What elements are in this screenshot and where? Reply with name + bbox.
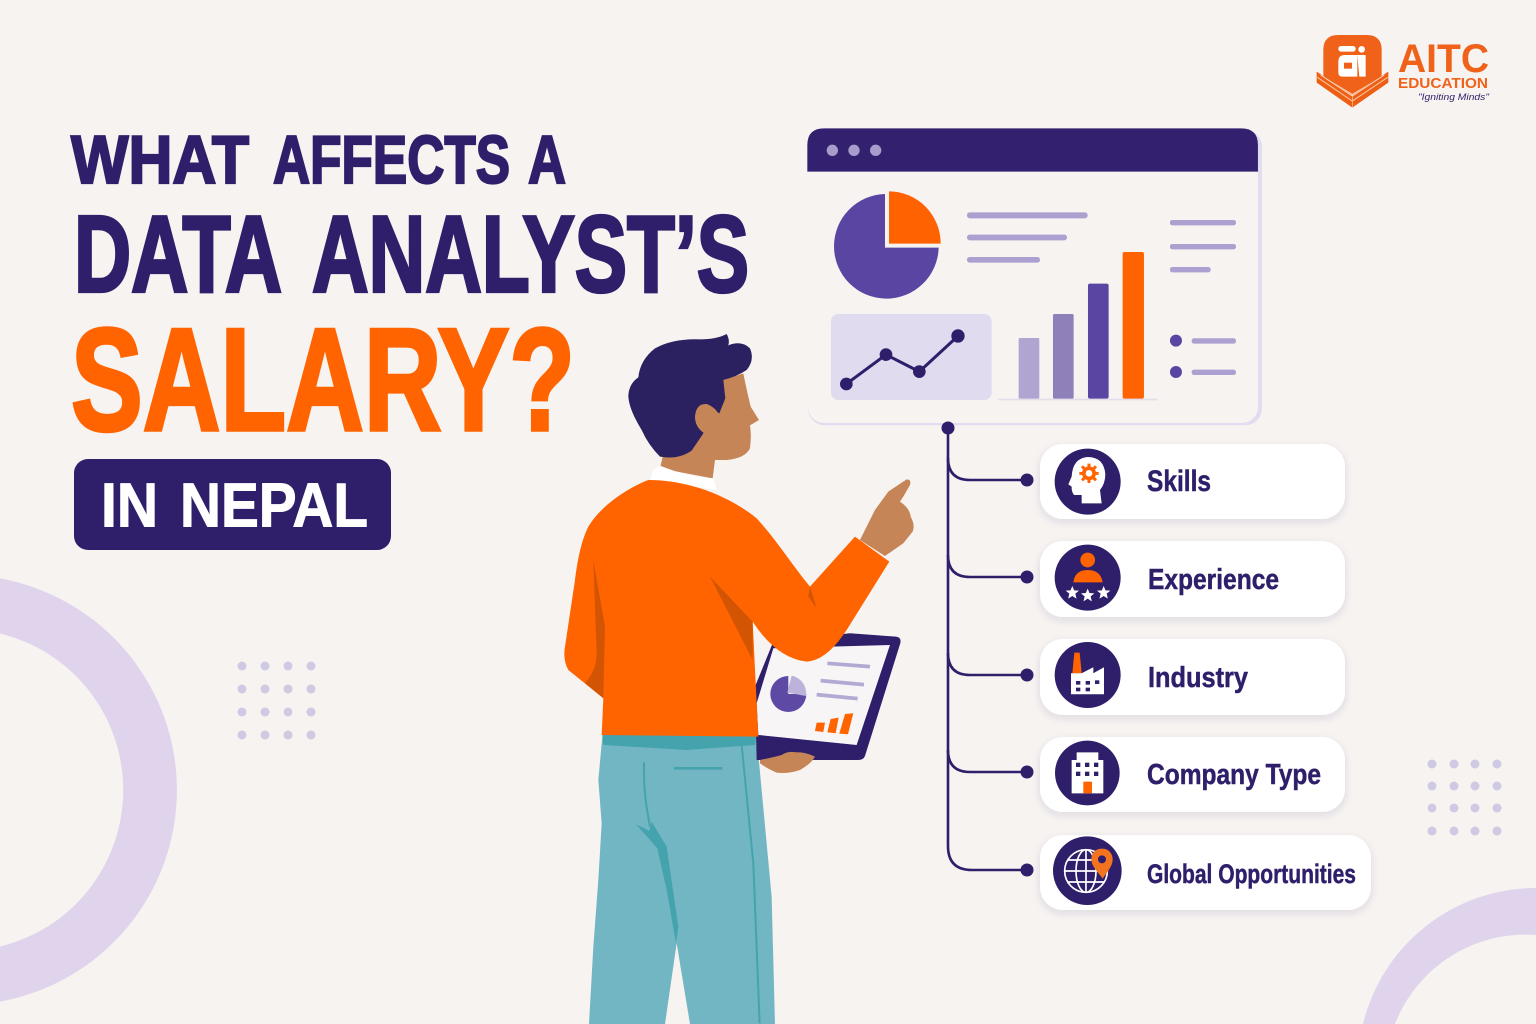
label: Industry: [1148, 662, 1248, 694]
panel: dashboard window: [807, 128, 1262, 425]
icon: head with gear: [1055, 449, 1121, 515]
card: industry: [1040, 639, 1345, 715]
window buttons: [827, 145, 881, 156]
title: what affects a: A: [528, 122, 566, 198]
legend: [1170, 335, 1236, 378]
tablet: [755, 633, 901, 760]
card: global opportunities: [1040, 835, 1371, 910]
icon: factory: [1055, 642, 1121, 708]
label: Company Type: [1147, 759, 1321, 791]
card: experience: [1040, 541, 1345, 617]
text lines: top: [967, 212, 1088, 263]
trousers: [589, 735, 775, 1024]
hand holding tablet: [760, 752, 815, 773]
label: Skills: [1147, 465, 1211, 498]
label: Global Opportunities: [1147, 859, 1356, 889]
dot grid: left: [238, 662, 316, 740]
title: what affects a: AFFECTS: [273, 122, 510, 198]
logo: AITC Education: [1317, 35, 1490, 108]
decorative ring: bottom right: [1363, 888, 1536, 1024]
title: what affects a: [71, 122, 566, 198]
text lines: right: [1170, 220, 1236, 272]
window frame: [808, 130, 1262, 425]
dot grid: right: [1428, 760, 1502, 836]
icon: office building: [1055, 741, 1120, 805]
pie chart: [834, 191, 941, 299]
card: skills: [1040, 444, 1345, 519]
logo mark: [1317, 35, 1388, 108]
title: data analyst's: [74, 194, 749, 316]
ear: [695, 404, 720, 433]
title: what affects a: WHAT: [71, 122, 249, 198]
logo subtitle: EDUCATION: [1398, 76, 1488, 92]
badge: in nepal: [74, 459, 391, 550]
icon: globe with pin: [1053, 836, 1122, 905]
figure: analyst pointing at dashboard: [564, 334, 914, 1024]
logo tagline: "Igniting Minds": [1418, 92, 1490, 102]
logo wordmark: AITC: [1398, 37, 1489, 81]
label: Experience: [1148, 564, 1279, 596]
line chart: [831, 314, 992, 400]
hair: [628, 334, 752, 458]
title: salary: SALARY?: [71, 298, 575, 461]
sweater: [564, 480, 889, 737]
upper body, tablet and head: [564, 334, 914, 773]
card: company type: [1040, 737, 1345, 812]
decorative ring: left: [0, 578, 177, 1002]
neck and face: [660, 373, 759, 478]
sweater shadows: [585, 560, 817, 698]
badge: in nepal: IN: [101, 472, 158, 540]
title: data analyst's: ANALYST’S: [312, 194, 749, 316]
window body: [808, 129, 1258, 423]
title bar: [807, 128, 1258, 172]
icon: person with stars: [1055, 545, 1121, 611]
pointing hand: [860, 479, 914, 556]
bar chart: [998, 252, 1157, 400]
title: data analyst's: DATA: [74, 194, 282, 316]
collar: [650, 466, 717, 490]
connector lines: [942, 422, 1034, 876]
badge: in nepal: NEPAL: [180, 472, 368, 540]
